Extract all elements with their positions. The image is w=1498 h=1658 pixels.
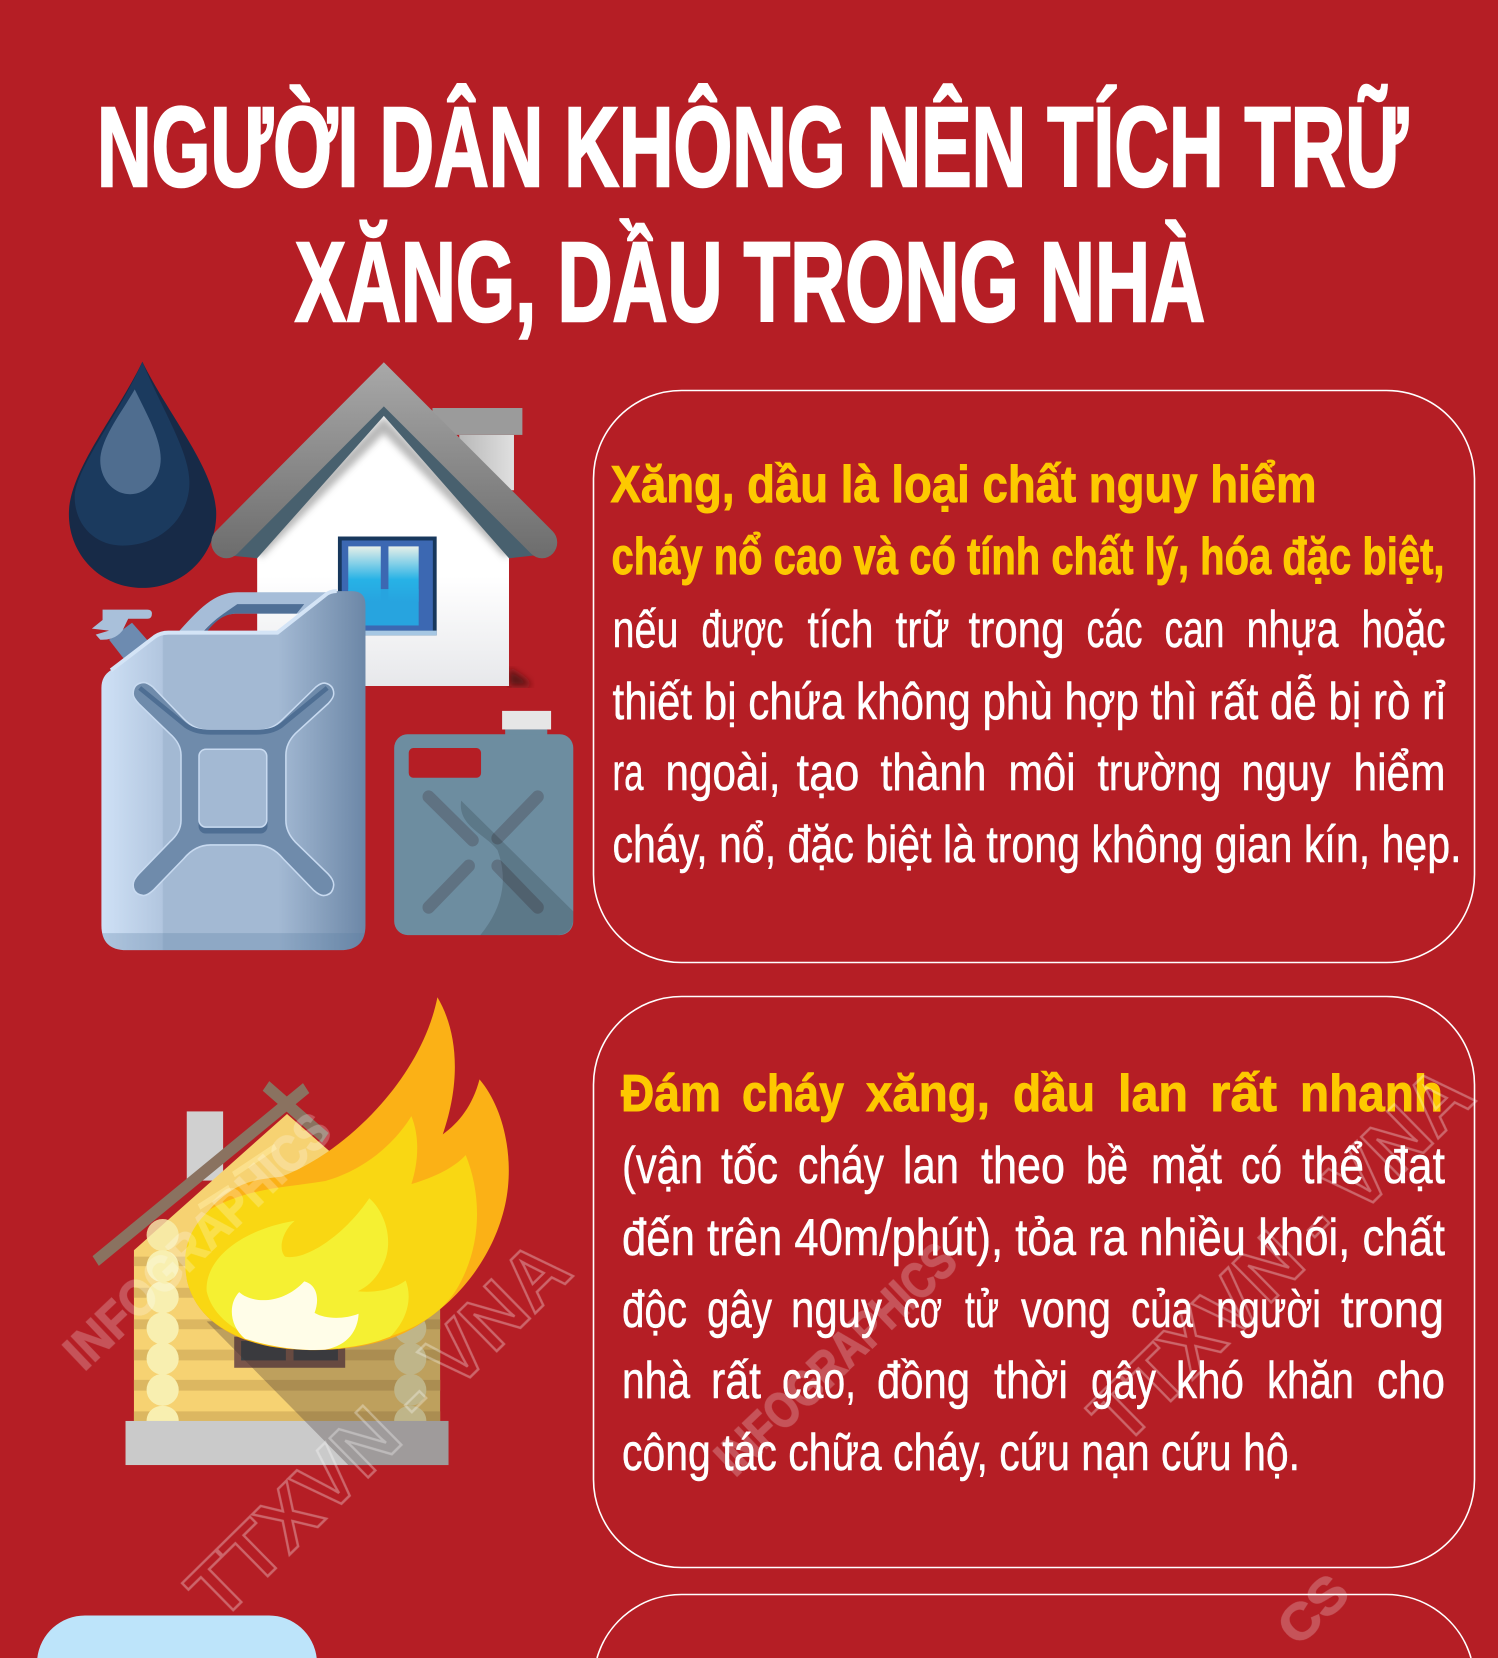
- text block: second paragraph: (vận: [622, 1137, 703, 1195]
- text block: second paragraph: thời: [994, 1352, 1068, 1410]
- text block: second paragraph: cháy: [742, 1065, 844, 1123]
- watermarks: CS: [1267, 1563, 1360, 1656]
- icon: log house walls: [134, 1114, 440, 1421]
- panel: third card, cropped at page bottom: [597, 1594, 1471, 1658]
- text block: second paragraph: của: [1131, 1281, 1193, 1339]
- text block: first paragraph: thành: [880, 744, 986, 802]
- text block: first paragraph: [610, 456, 1462, 874]
- text block: second paragraph: cơ: [903, 1281, 942, 1339]
- watermarks: [53, 1048, 1489, 1656]
- text block: second paragraph: vong: [1021, 1281, 1111, 1339]
- icon: flames: [185, 997, 509, 1350]
- text block: second paragraph: nguy: [791, 1281, 882, 1339]
- text block: first paragraph: can: [1164, 601, 1224, 659]
- watermarks: TTXVN - VNA: [170, 1223, 586, 1635]
- text block: first paragraph: ngoài,: [666, 744, 780, 802]
- illustration: burning log house: [96, 997, 509, 1465]
- watermarks: TTXVN - VNA: [1073, 1048, 1489, 1460]
- text block: second paragraph: cho: [1377, 1352, 1445, 1410]
- text block: second paragraph: nhanh: [1300, 1065, 1443, 1123]
- text block: second paragraph: khăn: [1267, 1352, 1354, 1410]
- text block: second paragraph: trong: [1341, 1281, 1444, 1339]
- long shadow: [207, 1309, 449, 1465]
- text block: first paragraph: hiểm: [1354, 744, 1446, 802]
- text block: first paragraph: hoặc: [1362, 601, 1446, 659]
- text block: second paragraph: mặt: [1151, 1137, 1222, 1195]
- icon: window: [234, 1337, 345, 1368]
- text block: second paragraph: cao,: [782, 1352, 856, 1410]
- text block: first paragraph: tạo: [796, 744, 860, 802]
- watermarks: INFOGRAPHICS: [53, 1102, 342, 1380]
- icon: foundation: [126, 1421, 449, 1465]
- watermarks: INFOGRAPHICS: [704, 1232, 967, 1486]
- icon: house: [227, 384, 542, 686]
- text block: second paragraph: đồng: [877, 1352, 970, 1410]
- text block: second paragraph: thể: [1302, 1137, 1364, 1195]
- text block: second paragraph: nhà: [622, 1352, 690, 1410]
- text block: second paragraph: tử: [965, 1281, 999, 1339]
- icon: large jerrycan: [92, 591, 365, 950]
- icon panel: light blue card, cropped: [37, 1615, 317, 1658]
- text block: first paragraph: các: [1086, 601, 1142, 659]
- text block: second paragraph: theo: [981, 1137, 1065, 1195]
- text block: second paragraph: Đám: [621, 1065, 721, 1123]
- text block: second paragraph: lan: [903, 1137, 959, 1195]
- text block: first paragraph: nguy: [1242, 744, 1330, 802]
- icon: roof beams: [96, 1086, 325, 1261]
- text block: second paragraph: người: [1216, 1281, 1321, 1339]
- text block: second paragraph: xăng,: [866, 1065, 990, 1123]
- icon: chimney: [187, 1111, 223, 1181]
- panel: hazardous properties: [594, 390, 1474, 962]
- text block: second paragraph: lan: [1118, 1065, 1188, 1123]
- text block: second paragraph: gây: [707, 1281, 772, 1339]
- text block: second paragraph: cháy: [798, 1137, 884, 1195]
- icon: small fuel can: [394, 711, 573, 935]
- text block: second paragraph: rất: [711, 1352, 761, 1410]
- icon: oil drop: [69, 362, 216, 588]
- title: [97, 84, 1408, 345]
- text block: second paragraph: độc: [622, 1281, 687, 1339]
- panel: fire spread: [594, 996, 1474, 1568]
- text block: first paragraph: trong: [968, 601, 1064, 659]
- text block: second paragraph: tốc: [721, 1137, 778, 1195]
- text block: second paragraph: đạt: [1383, 1137, 1445, 1195]
- text block: first paragraph: trường: [1098, 744, 1222, 802]
- text block: first paragraph: môi: [1008, 744, 1076, 802]
- text block: second paragraph: rất: [1210, 1065, 1277, 1123]
- text block: second paragraph: khó: [1176, 1352, 1244, 1410]
- text block: first paragraph: được: [702, 601, 784, 659]
- text block: first paragraph: tích: [808, 601, 874, 659]
- text block: second paragraph: gây: [1091, 1352, 1156, 1410]
- text block: second paragraph: dầu: [1013, 1065, 1095, 1123]
- illustration: oil drop, house and fuel cans: [69, 362, 573, 950]
- text block: first paragraph: trữ: [896, 601, 950, 659]
- text block: second paragraph: có: [1241, 1137, 1282, 1195]
- text block: first paragraph: Xăng, dầu là loại chất nguy hiểm: [610, 456, 1316, 514]
- text block: second paragraph: [621, 1065, 1445, 1482]
- text block: second paragraph: bề: [1086, 1137, 1128, 1195]
- text block: first paragraph: nếu: [612, 601, 678, 659]
- text block: first paragraph: ra: [612, 744, 644, 802]
- text block: second paragraph: công tác chữa cháy, cứu nạn cứu hộ.: [622, 1424, 1300, 1482]
- text block: first paragraph: nhựa: [1246, 601, 1339, 659]
